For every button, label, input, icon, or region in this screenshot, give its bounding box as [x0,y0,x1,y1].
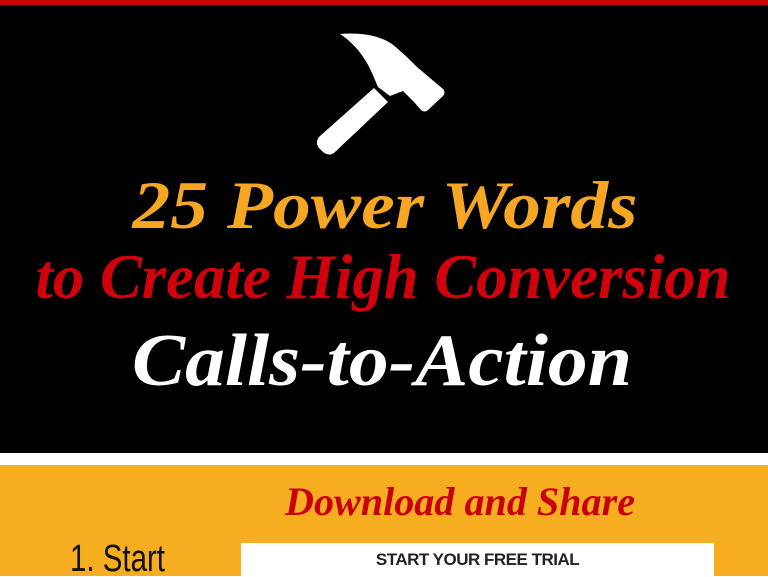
yellow bottom panel [0,465,768,576]
button: start your free trial: START YOUR FREE TRIAL [376,550,579,569]
icon: hammer [317,33,444,155]
black header panel [0,5,768,453]
button: start your free trial [241,543,714,576]
title line 3: Calls-to-Action [132,320,632,402]
title line 2: to Create High Conversion [36,241,730,312]
top red strip [0,0,768,5]
title line 1: 25 Power Words [131,167,637,243]
heading: Download and Share: Download and Share [284,479,635,524]
